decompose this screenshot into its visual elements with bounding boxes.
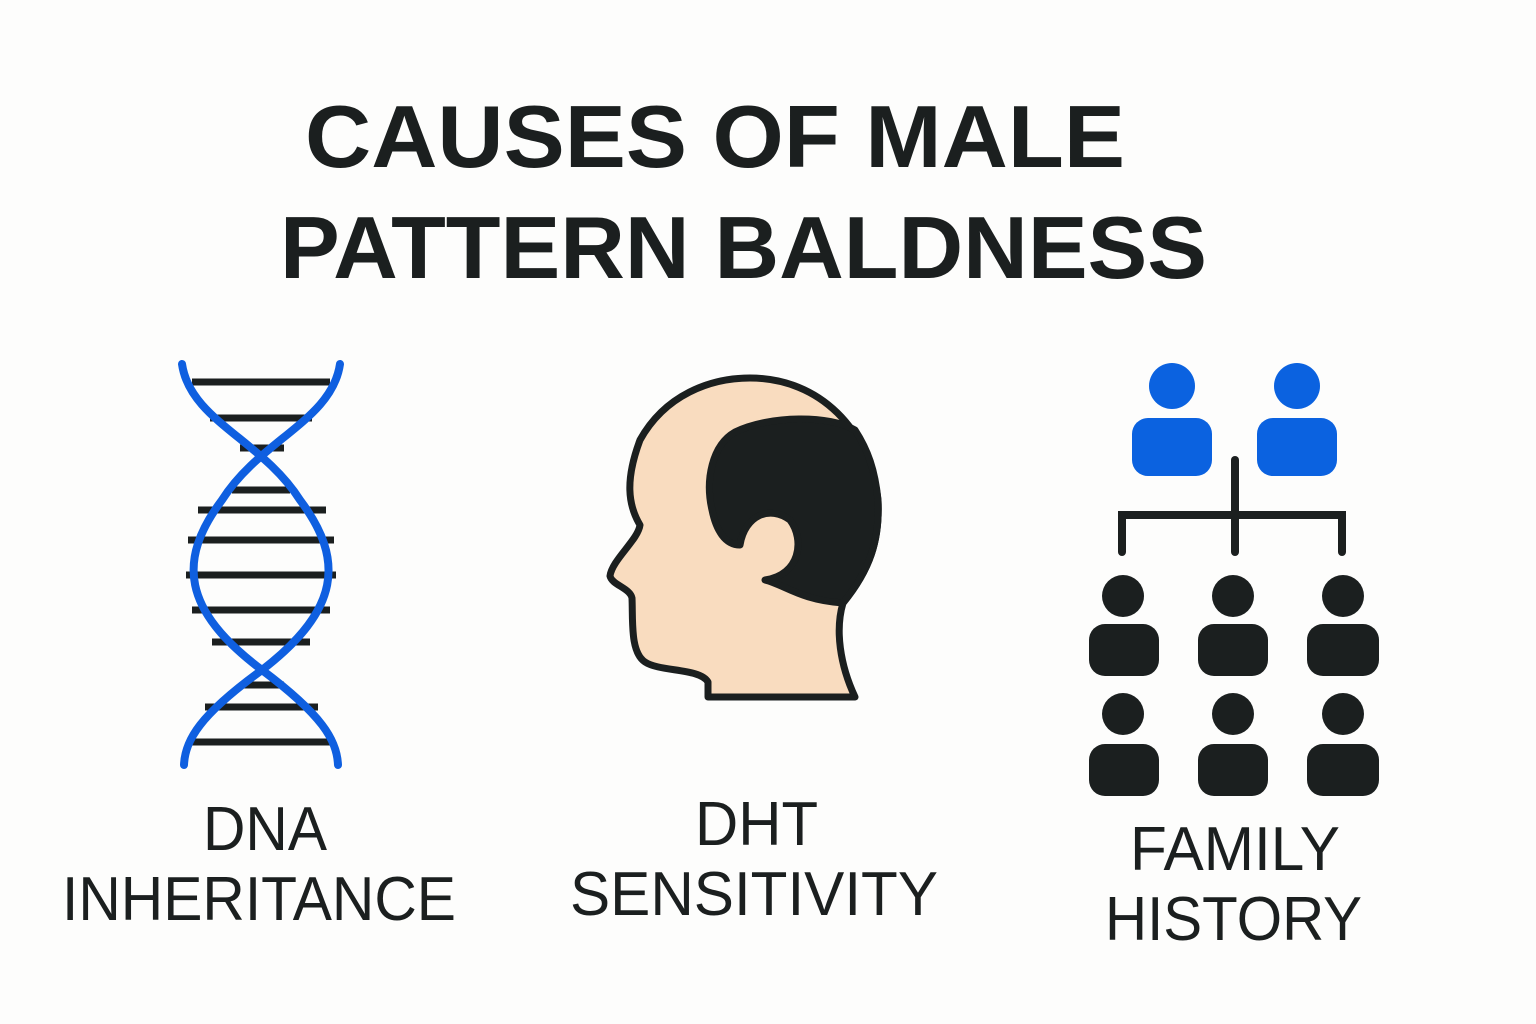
label: DHT sensitivity <box>570 790 938 929</box>
icon: DNA helix <box>182 364 340 765</box>
label: DHT sensitivity: SENSITIVITY <box>570 860 938 929</box>
title: CAUSES OF MALE <box>305 87 1125 186</box>
label: DNA inheritance: INHERITANCE <box>62 865 456 934</box>
label: family history <box>1105 815 1362 954</box>
title <box>280 87 1207 297</box>
label: DNA inheritance <box>62 795 456 934</box>
label: DNA inheritance: DNA <box>203 795 328 864</box>
title: PATTERN BALDNESS <box>280 198 1207 297</box>
label: DHT sensitivity: DHT <box>695 790 818 859</box>
icon: family tree <box>1089 363 1379 796</box>
icon: balding head <box>610 378 878 697</box>
label: family history: HISTORY <box>1105 885 1362 954</box>
label: family history: FAMILY <box>1130 815 1340 884</box>
